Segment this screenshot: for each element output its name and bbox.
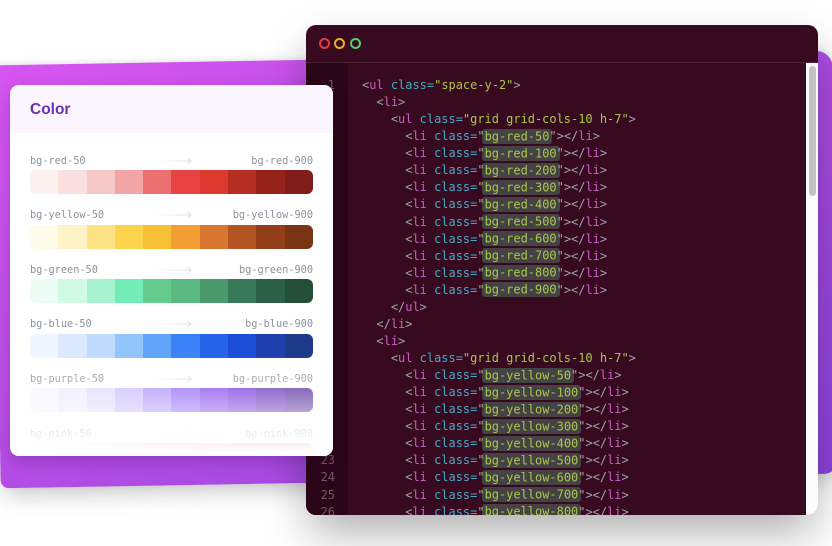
label: blue end: bg-blue-900 bbox=[245, 318, 313, 330]
swatch bar: red bbox=[30, 170, 313, 194]
editor title bar bbox=[306, 25, 818, 63]
window button: green bbox=[350, 38, 361, 49]
label: yellow end: bg-yellow-900 bbox=[233, 209, 313, 221]
swatch bar: green bbox=[30, 279, 313, 303]
code listing: <ul class="space-y-2"> <li> <ul class="grid grid-cols-10 h-7"> <li class="bg-red-50"></li> <li class="bg-red-100"></li> <li class="bg-red-200"></li> <li class="bg-red-300"></li> <li class="bg-red-400"></li> <li class="bg-red-500"></li> <li class="bg-red-600"></li> <li class="bg-red-700"></li> <li class="bg-red-800"></li> <li class="bg-red-900"></li> </ul> </li> <li> <ul class="grid grid-cols-10 h-7"> <li class="bg-yellow-50"></li> <li class="bg-yellow-100"></li> <li class="bg-yellow-200"></li> <li class="bg-yellow-300"></li> <li class="bg-yellow-400"></li> <li class="bg-yellow-500"></li> <li class="bg-yellow-600"></li> <li class="bg-yellow-700"></li> <li class="bg-yellow-800"></li> bbox=[362, 78, 636, 515]
label: pink end: bg-pink-900 bbox=[245, 428, 313, 440]
arrow bbox=[162, 158, 192, 164]
row: pink scale bbox=[30, 428, 313, 448]
line numbers: 1 23 24 25 26 bbox=[321, 78, 335, 515]
label: red start: bg-red-50 bbox=[30, 154, 86, 166]
row: yellow scale bbox=[30, 209, 313, 249]
swatch bar: yellow bbox=[30, 225, 313, 249]
swatch bar: blue bbox=[30, 334, 313, 358]
panel: color palette bbox=[10, 85, 333, 456]
label: purple end: bg-purple-900 bbox=[233, 373, 313, 385]
window button: yellow bbox=[334, 38, 345, 49]
label: purple start: bg-purple-50 bbox=[30, 373, 104, 385]
row: purple scale bbox=[30, 373, 313, 412]
arrow bbox=[164, 376, 192, 382]
label: pink start: bg-pink-50 bbox=[30, 428, 92, 440]
swatch bar: purple bbox=[58, 388, 313, 412]
code editor window bbox=[306, 25, 818, 515]
swatch bar: pink bbox=[143, 443, 312, 448]
line number gutter bbox=[306, 63, 348, 515]
label: green end: bg-green-900 bbox=[239, 264, 313, 276]
row: green scale bbox=[30, 264, 313, 303]
arrow bbox=[153, 430, 193, 438]
label: red end: bg-red-900 bbox=[251, 154, 313, 166]
window button: red bbox=[319, 38, 330, 49]
arrow bbox=[162, 266, 192, 274]
label: yellow start: bg-yellow-50 bbox=[30, 209, 104, 221]
scrollbar bbox=[806, 63, 818, 515]
arrow bbox=[162, 320, 192, 328]
label: green start: bg-green-50 bbox=[30, 264, 98, 276]
panel heading: Color bbox=[30, 101, 70, 118]
row: red scale bbox=[30, 154, 313, 194]
white fade overlay bbox=[10, 355, 333, 456]
label: blue start: bg-blue-50 bbox=[30, 318, 92, 330]
arrow bbox=[162, 212, 192, 218]
panel heading bbox=[10, 85, 333, 133]
row: blue scale bbox=[30, 318, 313, 358]
